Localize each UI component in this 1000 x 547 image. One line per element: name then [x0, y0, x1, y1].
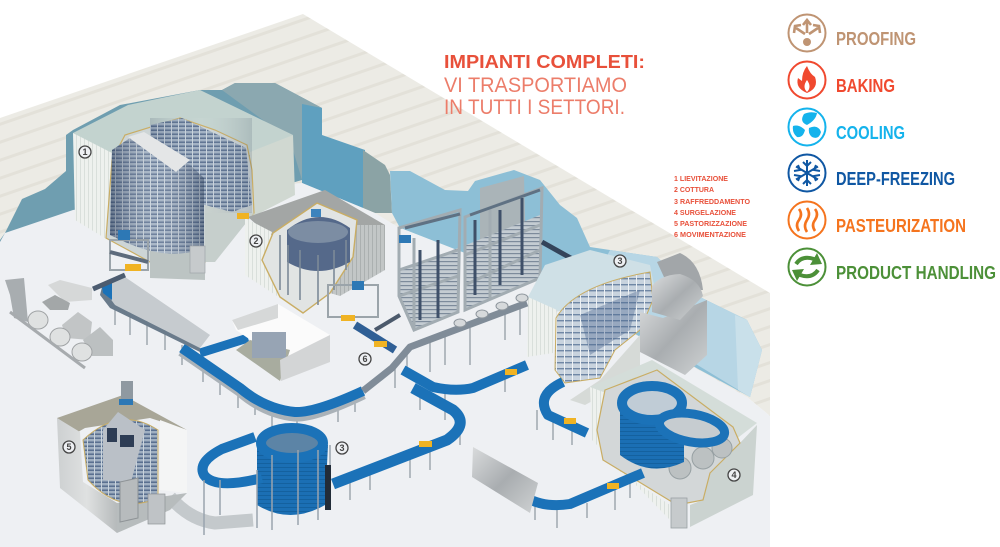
- room front wall: [280, 335, 330, 381]
- process list: 3 RAFFREDDAMENTO: [674, 199, 751, 206]
- marker 3 centre: [336, 442, 348, 454]
- main blue conveyor: [182, 350, 363, 415]
- mixer column: [5, 278, 28, 322]
- legend: cooling: COOLING: [836, 123, 905, 143]
- marker 2: 2: [253, 236, 259, 246]
- product trays: [125, 213, 619, 489]
- control box: [671, 498, 687, 528]
- conveyor to cooling: [544, 382, 587, 433]
- legend: product handling: [788, 248, 996, 286]
- steel box: [472, 447, 538, 513]
- room back walls: [232, 304, 330, 360]
- control cabinet: [190, 246, 205, 273]
- back wall: insulated blue panels: [0, 83, 762, 397]
- baking spiral: [287, 217, 350, 271]
- building 4 cutaway: [597, 370, 740, 505]
- steel hood rear: [657, 253, 703, 290]
- legend: baking: BAKING: [836, 76, 895, 96]
- left teal wall: [0, 83, 322, 245]
- racks: [252, 332, 286, 358]
- title: [444, 51, 645, 119]
- black side panel: [325, 465, 331, 510]
- legend: [788, 14, 996, 286]
- number markers: [63, 146, 740, 481]
- steel conveyor from building 5: [170, 497, 253, 523]
- frame conveyors: [399, 176, 592, 330]
- building 2 cutaway: [262, 203, 357, 313]
- spiral top ring: [261, 428, 323, 458]
- title: IN TUTTI I SETTORI.: [444, 96, 625, 119]
- steel bowls: [454, 294, 528, 327]
- central column: [103, 412, 145, 482]
- storage room: [232, 304, 330, 381]
- legend: cooling: [788, 108, 905, 146]
- legend: pasteurization: [788, 202, 966, 238]
- marker 5: [63, 441, 75, 453]
- control box: [148, 494, 165, 524]
- ventilation block: [640, 300, 707, 375]
- building 2 right wall: [330, 225, 385, 296]
- cooling spiral: [555, 272, 653, 383]
- building 3 right: cooling: [527, 250, 707, 405]
- conveyor legs: [115, 300, 630, 528]
- legend: baking: [788, 62, 895, 98]
- steel rising conveyor: [363, 303, 527, 391]
- room floor: [236, 340, 290, 381]
- spiral rods: [280, 235, 346, 305]
- process list: 5 PASTORIZZAZIONE: [674, 221, 747, 228]
- discharge machinery: [328, 281, 400, 350]
- pasteurization spiral: [83, 420, 158, 504]
- freezing spiral loop: [657, 408, 727, 448]
- support rods: [204, 445, 330, 535]
- steel hood front: [652, 274, 703, 320]
- freezing spiral: [620, 402, 684, 469]
- building 3 lower wall: [570, 335, 640, 405]
- building 5 right wall: [117, 493, 187, 533]
- marker 1: 1: [82, 147, 88, 157]
- building 5: pasteurization: [57, 381, 187, 533]
- grey rear panel: [480, 176, 526, 280]
- title: IMPIANTI COMPLETI:: [444, 51, 645, 72]
- proofing spiral tower back: [150, 118, 252, 212]
- building 1 right wall: [250, 135, 295, 218]
- blue motor: [311, 209, 321, 217]
- building 1 cutaway: [106, 118, 254, 262]
- marker 6: [359, 353, 371, 365]
- blue motor: [399, 235, 411, 243]
- building 2 roof: [248, 190, 385, 240]
- branch to storage room: [200, 338, 248, 353]
- building 4 roof: [590, 360, 757, 440]
- infeed conveyor: [93, 275, 125, 289]
- mixing hoods: [48, 280, 92, 302]
- dark rail conveyors: [535, 242, 592, 298]
- spiral loop: [202, 437, 262, 483]
- kettle group: [5, 278, 113, 368]
- freezer fans: [669, 438, 732, 479]
- ladder top: [121, 381, 133, 399]
- centre blue wall: [302, 104, 365, 208]
- building 1: proofing: [73, 90, 295, 280]
- building 1 roof: [73, 90, 293, 155]
- building 2: baking: [245, 190, 400, 350]
- proofing spiral tower front: [110, 138, 204, 254]
- process list: 4 SURGELAZIONE: [674, 210, 736, 217]
- dark uprights: [420, 198, 522, 320]
- building 4 left wall: [590, 387, 670, 520]
- building 4 right wall: [690, 425, 757, 527]
- legend: proofing: [788, 14, 916, 52]
- process list: 2 COTTURA: [674, 187, 714, 194]
- building 1 left wall: [73, 133, 112, 240]
- oven: [93, 275, 210, 352]
- title: VI TRASPORTIAMO: [444, 74, 627, 97]
- process list: 1 LIEVITAZIONE: [674, 176, 728, 183]
- building 5 left wall: [57, 418, 117, 533]
- kettle base rail: [10, 312, 85, 368]
- frame bars: [399, 188, 542, 330]
- lower S conveyor: [333, 388, 460, 484]
- chamber floor and pedestal: [205, 205, 254, 262]
- spiral stack: [257, 445, 328, 515]
- building 3 translucent roof: [528, 250, 655, 312]
- machinery frame: [110, 230, 148, 270]
- central blue spiral: [202, 428, 331, 535]
- marker 3 right: [614, 255, 626, 267]
- conveyors: [125, 213, 643, 523]
- legend: proofing: PROOFING: [836, 29, 916, 49]
- process list: [674, 176, 751, 239]
- top beams: [405, 190, 540, 228]
- marker 4: [728, 469, 740, 481]
- kettles: [28, 311, 48, 329]
- building 2 left wall: [245, 218, 303, 313]
- long light blue wall: [390, 170, 762, 397]
- right frame lower grate: [466, 215, 540, 310]
- building 3 left wall: [527, 297, 557, 357]
- marker 1: [79, 146, 91, 158]
- building 5 roof: [57, 395, 187, 432]
- building 4: deep-freezing: [590, 360, 757, 528]
- process list: 6 MOVIMENTAZIONE: [674, 232, 746, 239]
- left frame lower grate: [400, 248, 458, 330]
- legend: deep-freezing: DEEP-FREEZING: [836, 169, 955, 189]
- conveyor to freezer: [527, 473, 643, 505]
- marker 5: 5: [66, 442, 72, 452]
- legend: deep-freezing: [788, 154, 955, 192]
- marker 6: 6: [362, 354, 368, 364]
- middle blue conveyor: [403, 365, 527, 390]
- marker 2: [250, 235, 262, 247]
- marker 3 right: 3: [617, 256, 623, 266]
- marker 3 centre: 3: [339, 443, 345, 453]
- marker 4: 4: [731, 470, 737, 480]
- tower top slab: [128, 132, 190, 172]
- door: [120, 478, 138, 522]
- legend: pasteurization: PASTEURIZATION: [836, 216, 966, 236]
- floor: [0, 183, 770, 547]
- roof: [0, 14, 770, 416]
